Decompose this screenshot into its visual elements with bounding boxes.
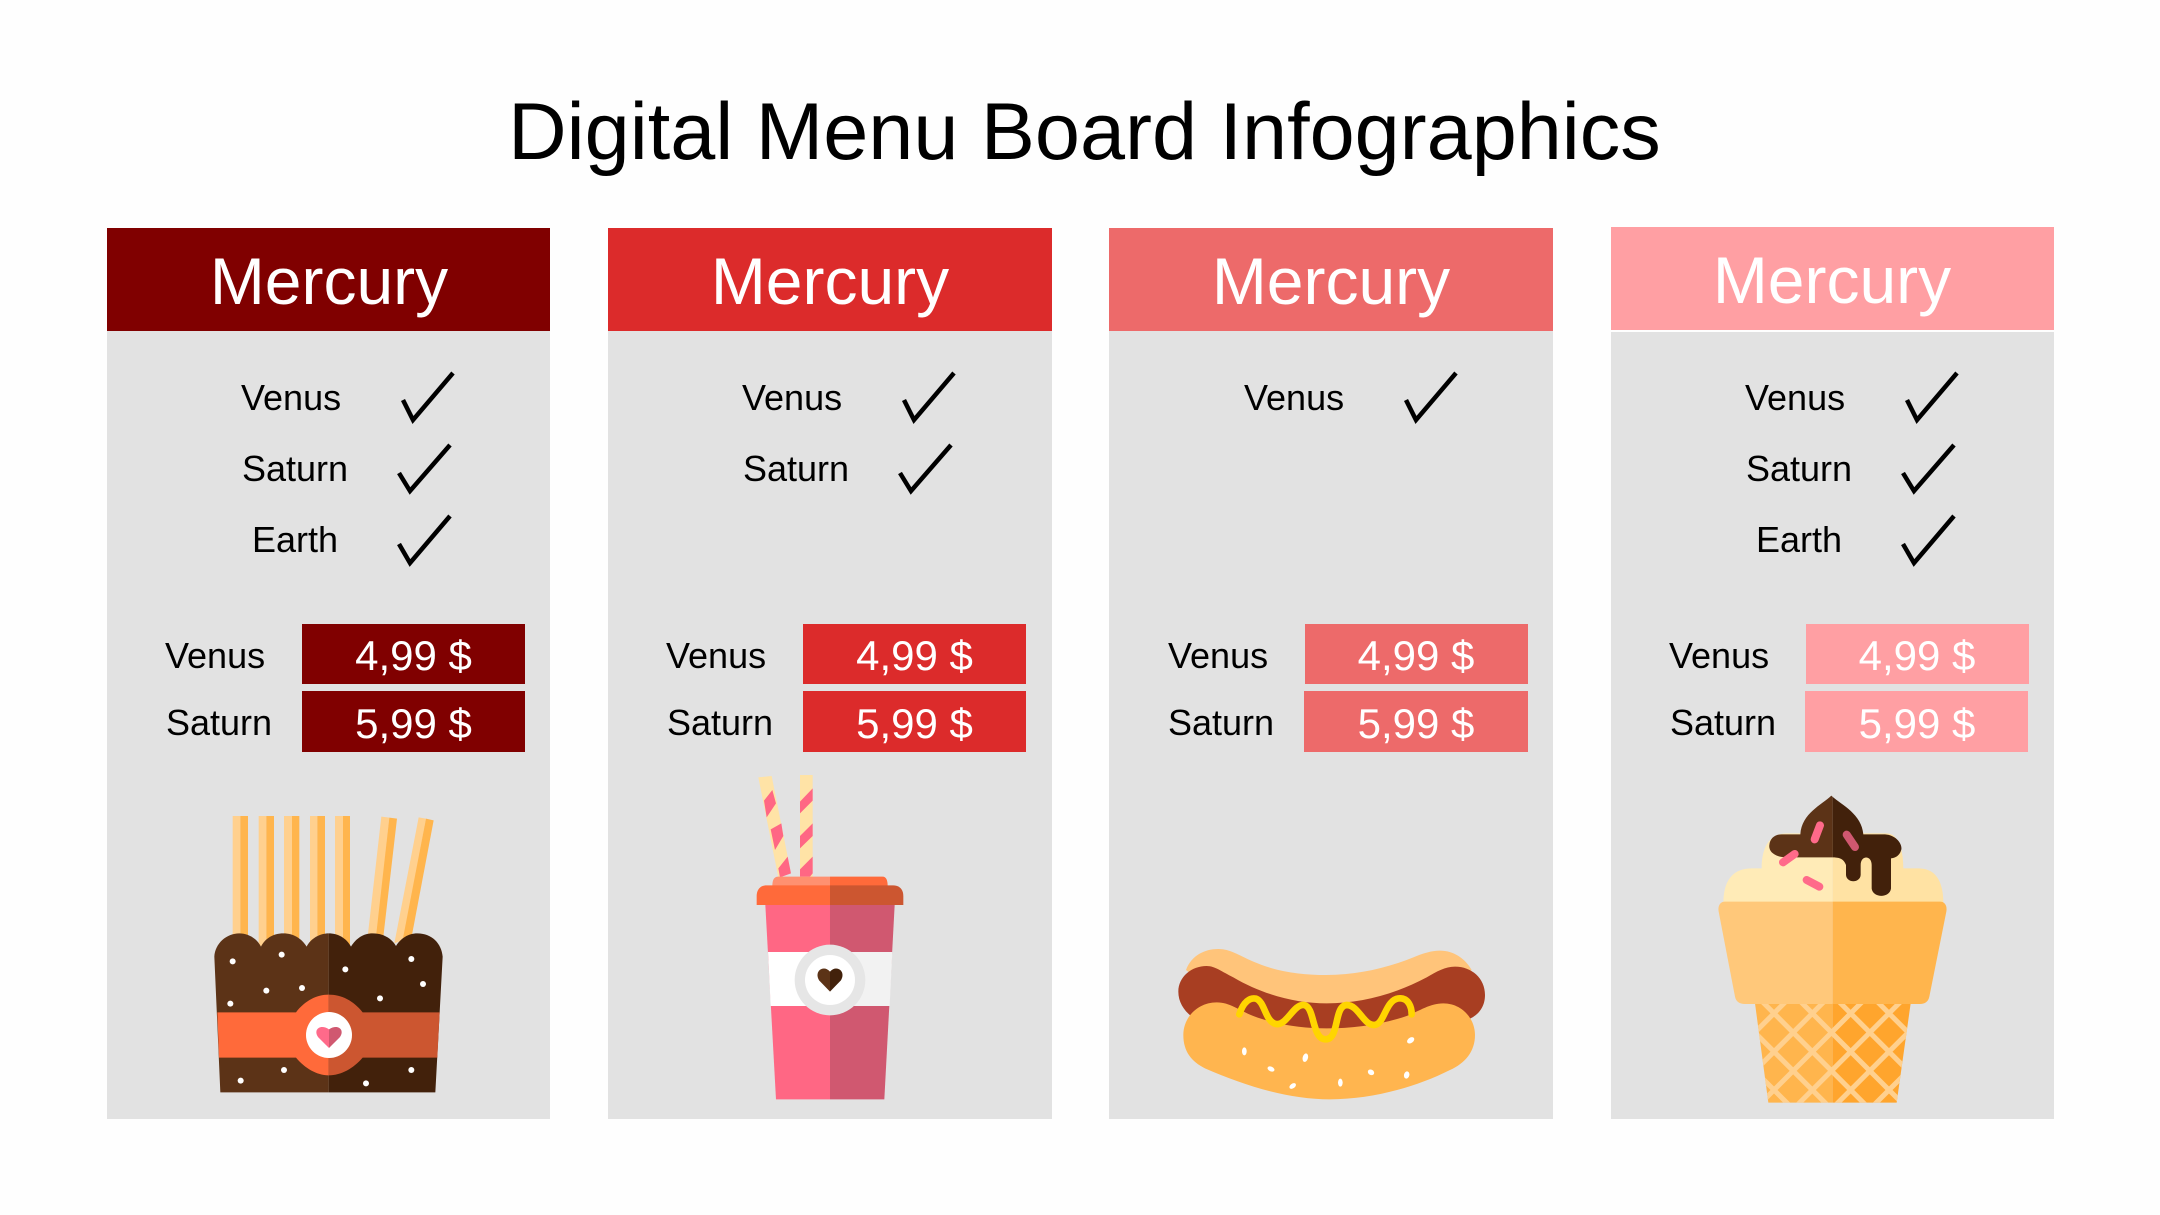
icon: hot dog (1178, 949, 1485, 1099)
price: Saturn: 5,99 $ (856, 700, 973, 747)
price: Saturn: 5,99 $ (1358, 700, 1474, 747)
feature: Venus check: Venus (1244, 377, 1344, 418)
panel background (608, 331, 1052, 1119)
panel header: Mercury (711, 244, 949, 318)
feature: Saturn check (1746, 445, 1954, 491)
price: Venus (1168, 624, 1528, 684)
price: Venus: 4,99 $ (355, 632, 472, 679)
panel: Mercury 3, coral, hot dog (1109, 228, 1553, 1119)
feature: Earth check (252, 516, 450, 563)
price: Venus: 4,99 $ (856, 632, 973, 679)
price: Venus: Venus (1168, 635, 1268, 676)
feature: Saturn check: Saturn (743, 448, 849, 489)
price: Venus: Venus (165, 635, 265, 676)
feature: Venus check: Venus (241, 377, 341, 418)
panel background (107, 331, 550, 1119)
price: Saturn (667, 691, 1026, 752)
feature: Venus check (241, 373, 453, 420)
price: Saturn: Saturn (166, 702, 272, 743)
panel header: Mercury (1212, 244, 1450, 318)
price: Saturn: 5,99 $ (355, 700, 472, 747)
price: Saturn: Saturn (1168, 702, 1274, 743)
panel: Mercury 4, pink, ice cream (1611, 227, 2054, 1119)
feature: Saturn check (743, 445, 951, 491)
feature: Venus check (1244, 373, 1456, 420)
price: Saturn: Saturn (1670, 702, 1776, 743)
feature: Earth check (1756, 516, 1954, 563)
price: Saturn: 5,99 $ (1859, 700, 1975, 747)
panel header (608, 228, 1052, 331)
feature: Venus check: Venus (742, 377, 842, 418)
feature: Saturn check: Saturn (242, 448, 348, 489)
panel header (1109, 228, 1553, 331)
icon: ice cream (1718, 796, 1947, 1103)
price: Venus: Venus (666, 635, 766, 676)
price: Venus: 4,99 $ (1859, 632, 1975, 679)
icon: fries (214, 816, 443, 1092)
panel header: Mercury (210, 244, 448, 318)
feature: Earth check: Earth (252, 519, 338, 560)
price: Saturn (1168, 691, 1528, 752)
feature: Saturn check (242, 445, 450, 491)
feature: Earth check: Earth (1756, 519, 1842, 560)
price: Venus (666, 624, 1026, 684)
panel background (1611, 332, 2054, 1119)
feature: Venus check: Venus (1745, 377, 1845, 418)
panel background (1109, 331, 1553, 1119)
panel: Mercury 2, red, drink (608, 228, 1052, 1119)
panel header (107, 228, 550, 331)
panel header: Mercury (1713, 243, 1951, 317)
feature: Venus check (1745, 373, 1957, 420)
price: Saturn (1670, 691, 2028, 752)
panel header (1611, 227, 2054, 330)
price: Venus (165, 624, 525, 684)
price: Venus: Venus (1669, 635, 1769, 676)
panel: Mercury 1, dark red, fries (107, 228, 550, 1119)
price: Saturn: Saturn (667, 702, 773, 743)
feature: Saturn check: Saturn (1746, 448, 1852, 489)
title: Digital Menu Board Infographics (508, 87, 1661, 177)
icon: drink cup (757, 775, 903, 1099)
price: Saturn (166, 691, 525, 752)
price: Venus: 4,99 $ (1358, 632, 1474, 679)
feature: Venus check (742, 373, 954, 420)
price: Venus (1669, 624, 2029, 684)
